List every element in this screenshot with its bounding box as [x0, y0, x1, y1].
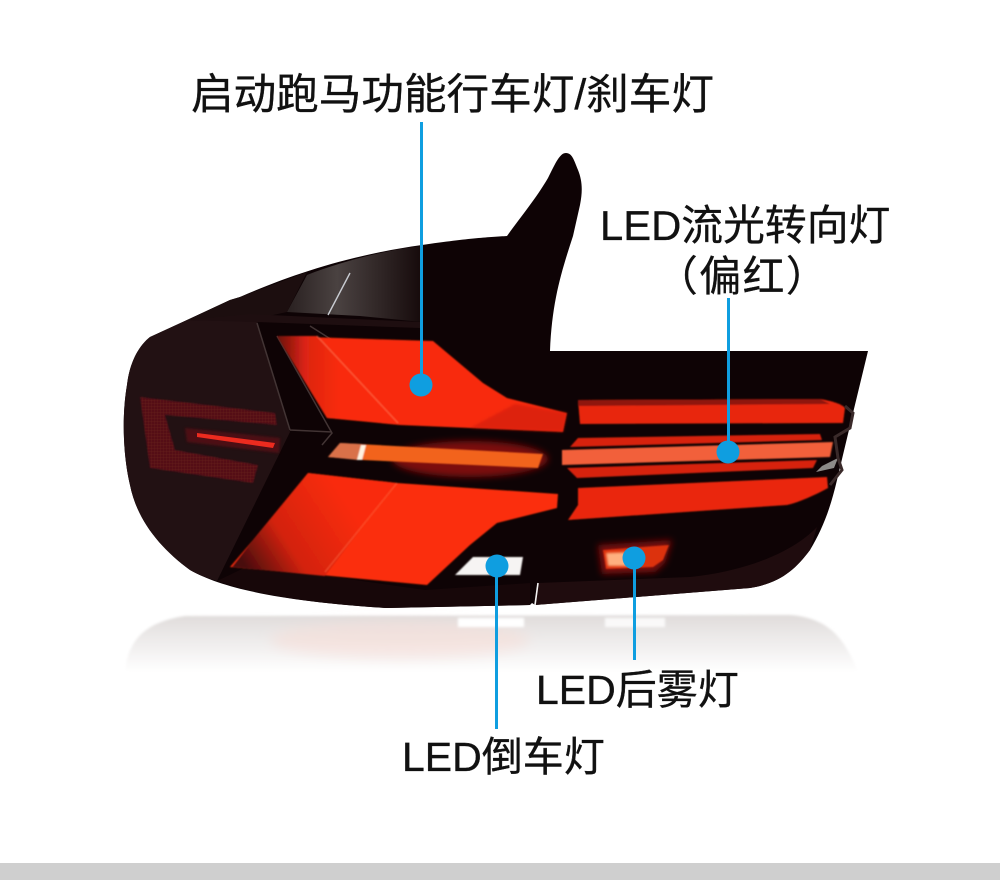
- lens side trim: [830, 406, 853, 485]
- label: turn signal: LED流光转向灯: [600, 202, 890, 249]
- lower left lip: [217, 565, 530, 608]
- chrome tip: [816, 458, 838, 472]
- left dark panel: [124, 320, 290, 581]
- label: reverse lamp: LED倒车灯: [402, 734, 605, 780]
- right lower bar: [568, 477, 828, 520]
- chevron highlights: [257, 323, 340, 445]
- label: turn signal: [600, 202, 890, 300]
- callout line: reverse lamp: [486, 554, 508, 729]
- tail light assembly: [124, 153, 868, 608]
- body silhouette: [124, 153, 868, 608]
- upper left shoulder: [187, 272, 307, 320]
- title: running-horse light: 启动跑马功能行车灯/刹车灯: [191, 71, 714, 119]
- fog lamp: [598, 540, 672, 574]
- bottom grey band: [0, 863, 1000, 880]
- callout line: turn signal: [716, 298, 740, 464]
- callout line: fog lamp: [622, 546, 646, 660]
- right top bar: [578, 399, 845, 424]
- upper sheen: [287, 246, 422, 322]
- callout line: running light: [410, 122, 432, 396]
- lower red lamp: [230, 473, 558, 585]
- center side bar: [185, 428, 280, 453]
- floor reflection: [125, 615, 858, 672]
- lower right lip: [535, 527, 817, 605]
- honeycomb signature: [140, 397, 277, 483]
- label: fog lamp: LED后雾灯: [536, 667, 739, 713]
- label: turn signal: （偏红）: [656, 253, 829, 300]
- silver seam: [535, 583, 538, 605]
- middle amber lamp: [328, 443, 543, 468]
- sheen slit: [328, 273, 350, 315]
- right amber turn signal: [562, 442, 833, 465]
- center dark red glow: [392, 441, 548, 477]
- right middle bar reds: [567, 434, 822, 478]
- reverse lamp: [455, 557, 523, 575]
- upper red lamp: [277, 336, 567, 432]
